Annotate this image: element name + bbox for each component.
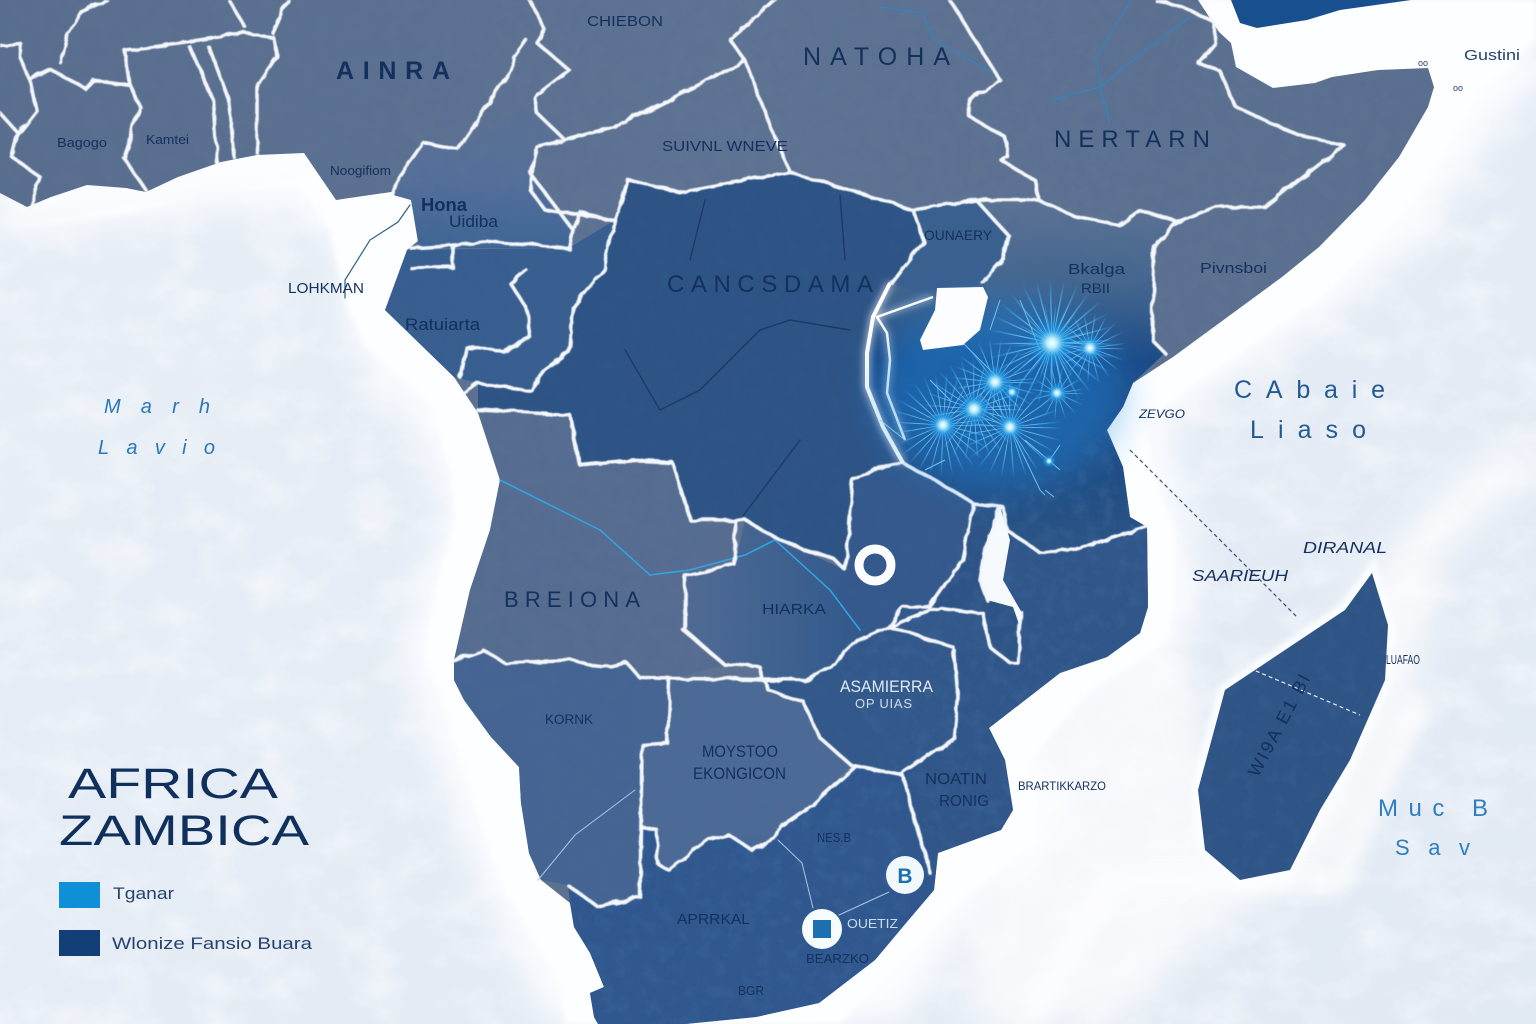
- rift valley glowing border: [867, 283, 933, 463]
- legend item: light blue: Tganar: [113, 884, 174, 903]
- network glow: Tanzania: [875, 300, 1125, 497]
- country: Breiona: [454, 410, 735, 680]
- map labels: Pivnsboi: [1200, 260, 1267, 277]
- map labels: Uidiba: [449, 212, 499, 231]
- map labels: Gustini: [1464, 47, 1520, 64]
- country: Moystoo: [642, 677, 851, 870]
- country: Asamierra: [764, 607, 990, 773]
- map labels: Muc B: [1378, 795, 1488, 822]
- map labels: AINRA: [336, 57, 450, 85]
- country: Aprrkal: [568, 767, 938, 1024]
- red sea dark water: [1231, 0, 1411, 28]
- map labels: SUIVNL WNEVE: [662, 138, 788, 155]
- map labels: NES.B: [817, 830, 851, 845]
- dashed route lines: [1130, 450, 1360, 715]
- map labels: oo: [1418, 58, 1428, 68]
- map marker: building badge: [802, 909, 842, 949]
- map labels: MOYSTOO: [702, 742, 778, 761]
- map labels: Kamtei: [146, 132, 189, 147]
- country: Cancsdama: [478, 172, 924, 570]
- map labels: WI9A E1 Bl: [1244, 672, 1314, 780]
- map labels: DIRANAL: [1303, 540, 1387, 557]
- map labels: OP UIAS: [855, 696, 912, 711]
- map labels: oo: [1453, 83, 1463, 93]
- map labels: Bagogo: [57, 136, 107, 150]
- map labels: EKONGICON: [693, 764, 786, 783]
- map labels: Hona: [421, 195, 468, 215]
- title: ZAMBICA: [59, 807, 309, 855]
- west africa borders: [0, 0, 288, 207]
- map labels: Noogifiom: [330, 163, 391, 178]
- country: central ring: [835, 463, 973, 640]
- namibia and botswana borders: [568, 680, 902, 907]
- map labels: Marh: [104, 396, 210, 418]
- map labels: OUNAERY: [924, 227, 993, 243]
- madagascar island: [1190, 565, 1395, 890]
- map labels: LUAFAO: [1386, 653, 1420, 667]
- country: east coast glow region: [867, 200, 1177, 553]
- map labels: KORNK: [545, 711, 594, 727]
- map labels: BGR: [738, 983, 764, 998]
- country: Mozambique: [902, 527, 1148, 873]
- map labels: BRARTIKKARZO: [1018, 779, 1106, 793]
- rivers: [345, 0, 1190, 915]
- malawi border left: [980, 507, 1000, 600]
- map labels: CANCSDAMA: [667, 271, 873, 298]
- map labels: Lavio: [98, 437, 215, 459]
- country: Ratuiarta: [385, 220, 615, 390]
- map labels: SAARIEUH: [1192, 568, 1289, 585]
- country: Hona: [393, 97, 573, 248]
- angola and zambia borders: [454, 520, 859, 680]
- map labels: Bkalga: [1068, 261, 1126, 278]
- glow rays: [917, 311, 1108, 453]
- central north borders: [393, 0, 790, 393]
- zimbabwe and malawi borders: [888, 607, 1022, 873]
- map labels: OUETIZ: [847, 916, 898, 931]
- map labels: Liaso: [1250, 416, 1366, 444]
- map labels: CHIEBON: [587, 13, 663, 30]
- ethiopia and somalia borders: [950, 0, 1344, 353]
- map labels: APRRKAL: [677, 911, 750, 928]
- map labels: CAbaie: [1234, 376, 1385, 404]
- title: AFRICA: [68, 760, 278, 808]
- map labels: NATOHA: [803, 43, 950, 71]
- map labels: NERTARN: [1054, 126, 1210, 153]
- glow branches: [880, 300, 1060, 497]
- title: [59, 760, 309, 855]
- map labels: ZEVGO: [1138, 407, 1185, 421]
- map labels: NOATIN: [925, 771, 987, 788]
- tanzania and zambia borders: [478, 410, 1147, 680]
- map labels: BREIONA: [504, 587, 640, 612]
- map labels: Ratuiarta: [405, 315, 481, 334]
- legend item: dark blue: Wlonize Fansio Buara: [112, 934, 313, 953]
- map labels: LOHKMAN: [288, 280, 364, 297]
- map labels: RBII: [1081, 280, 1110, 296]
- country: Ounaery: [890, 200, 1008, 297]
- legend item: dark blue: [59, 930, 313, 956]
- legend item: light blue: [59, 882, 174, 908]
- map labels: BEARZKO: [806, 951, 869, 966]
- land texture: [748, 430, 1129, 865]
- uganda and congo borders: [615, 172, 1039, 283]
- lake Victoria: [920, 287, 988, 350]
- lake Malawi: [980, 507, 1022, 627]
- glow nodes: [926, 317, 1105, 468]
- country: Malawi: [930, 503, 1020, 663]
- map marker: ring: [859, 549, 891, 581]
- map labels: HIARKA: [762, 601, 826, 618]
- country: Kornk: [454, 650, 669, 907]
- map marker: B badge: B: [897, 865, 913, 888]
- legend: [59, 882, 313, 956]
- country borders: [0, 0, 1344, 907]
- map labels: RONIG: [939, 793, 989, 810]
- map labels: Sav: [1395, 835, 1470, 860]
- country: Hiarka: [685, 520, 859, 680]
- map marker: B badge: [886, 856, 924, 894]
- map labels: ASAMIERRA: [840, 677, 934, 696]
